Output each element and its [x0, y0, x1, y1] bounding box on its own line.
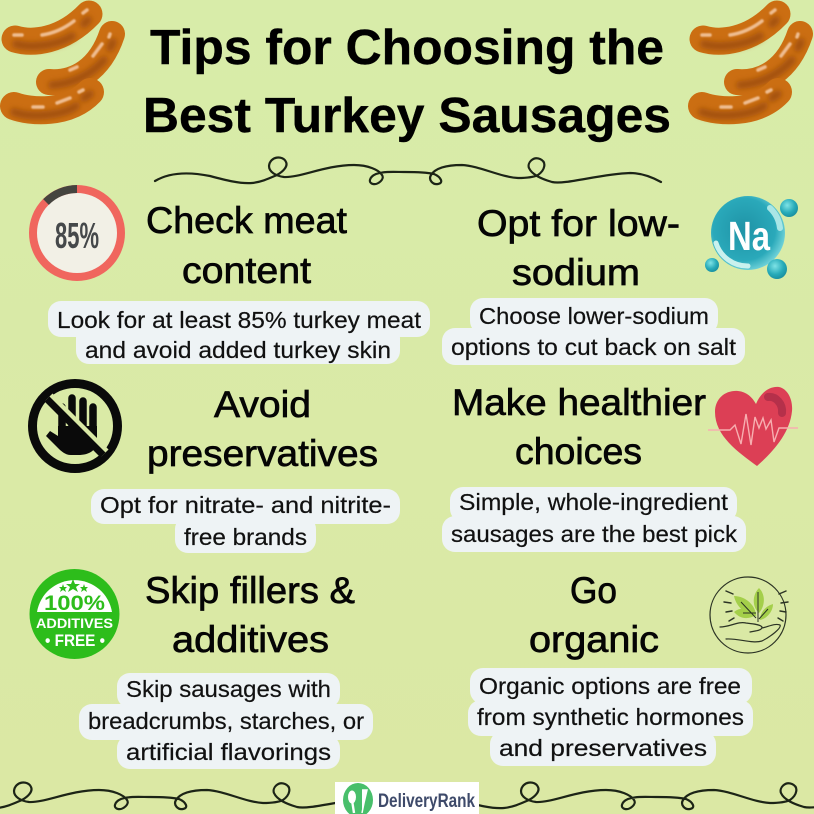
icon: sausages left [14, 10, 113, 115]
text block [91, 489, 400, 553]
heading: preservatives [147, 433, 378, 474]
text block: Choose lower-sodium [479, 303, 709, 329]
panel: avoid preservatives [32, 384, 400, 553]
text block [442, 487, 746, 552]
text block: and avoid added turkey skin [85, 337, 391, 363]
text block: sausages are the best pick [451, 521, 738, 547]
text block [48, 301, 430, 364]
text block: Opt for nitrate- and nitrite- [100, 492, 391, 518]
heading: choices [515, 431, 642, 472]
heading: Check meat [146, 200, 348, 241]
text block: Skip sausages with [126, 676, 331, 702]
text block [79, 673, 373, 769]
text block: artificial flavorings [126, 739, 331, 765]
icon: 85 percent ring [33, 189, 121, 277]
heading: sodium [512, 252, 640, 293]
text block: from synthetic hormones [477, 704, 744, 730]
text block: and preservatives [499, 735, 707, 761]
icon: sodium sphere [705, 196, 798, 279]
icon: sausages right [702, 10, 801, 115]
panel: make healthier choices [442, 382, 798, 552]
heading: Go [570, 570, 617, 611]
heading [477, 203, 680, 293]
icon: plant in hand [710, 577, 788, 653]
icon: sodium sphere: Na [728, 213, 771, 259]
heading: additives [172, 619, 329, 660]
heading: content [182, 250, 312, 291]
text block: options to cut back on salt [451, 334, 737, 360]
text block: breadcrumbs, starches, or [88, 708, 364, 734]
heading [529, 570, 659, 660]
title: Best Turkey Sausages [143, 89, 671, 143]
icon: heart [708, 387, 798, 466]
heading [147, 384, 378, 474]
heading [452, 382, 706, 472]
heading: organic [529, 619, 659, 660]
text block: Organic options are free [479, 673, 741, 699]
text block: Simple, whole-ingredient [459, 489, 729, 515]
icon: additives free badge: ADDITIVES [36, 615, 113, 631]
text block: free brands [184, 524, 307, 550]
panel: opt for low-sodium [442, 196, 798, 365]
text block: Look for at least 85% turkey meat [57, 307, 422, 333]
title: Tips for Choosing the [150, 21, 664, 75]
heading: Avoid [214, 384, 311, 425]
heading: Make healthier [452, 382, 706, 423]
logo: DeliveryRank: DeliveryRank [378, 791, 475, 812]
text block [442, 298, 745, 365]
logo: DeliveryRank [335, 782, 479, 814]
panel: skip fillers and additives [30, 569, 373, 769]
icon: additives free badge [30, 569, 120, 659]
icon: no hand [32, 384, 118, 468]
panel: go organic [468, 570, 788, 766]
title [143, 21, 671, 143]
icon: additives free badge: • FREE • [45, 631, 105, 650]
heading: Opt for low- [477, 203, 680, 244]
heading [145, 570, 355, 660]
heading: Skip fillers & [145, 570, 355, 611]
icon: 85 percent ring: 85% [55, 215, 99, 256]
panel: check meat content [33, 189, 430, 364]
text block [468, 668, 753, 766]
icon: additives free badge: 100% [44, 592, 105, 615]
heading [146, 200, 348, 291]
